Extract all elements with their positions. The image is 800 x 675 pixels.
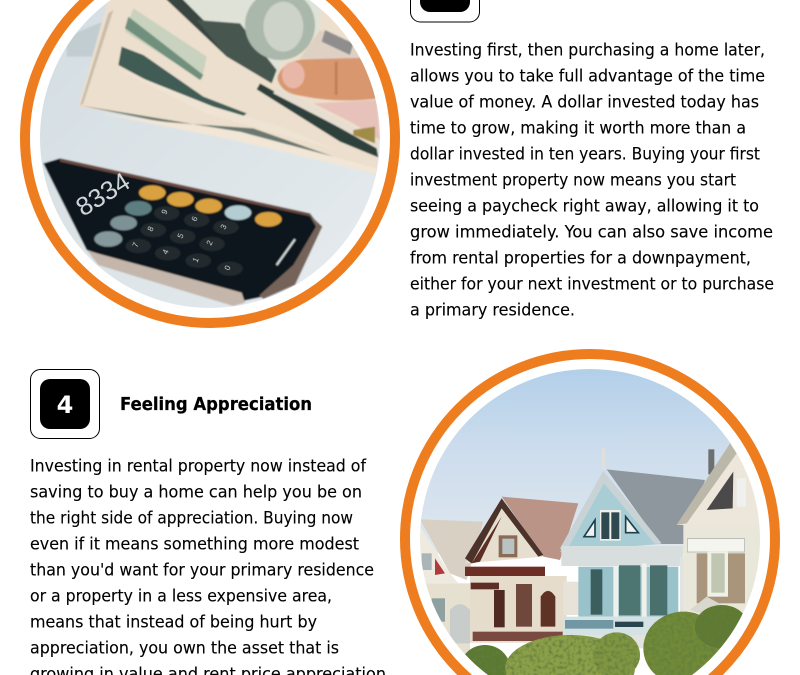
text block: invest first: either for your next investment or to purchase [410,274,774,294]
text block: invest first: a primary residence. [410,300,575,320]
text block: invest first [410,40,774,320]
blue house [607,469,705,544]
text block: invest first: value of money. A dollar invested today has [410,92,759,112]
text block: feeling appreciation: appreciation, you own the asset that is [30,638,339,658]
heading: feeling appreciation: Feeling Appreciation [120,394,312,415]
calculator keypad digits: 3 [219,223,229,231]
calculator keypad digits: 8 [146,225,156,233]
photo: cash and calculator phone [25,0,395,323]
text block: invest first: time to grow, making it worth more than a [410,118,746,138]
pink roof house [502,497,578,560]
calculator keypad digits: 5 [176,232,186,240]
photo: victorian houses [405,354,775,675]
text block: invest first: seeing a paycheck right away, allowing it to [410,196,759,216]
calculator keypad digits: 1 [191,256,201,264]
calculator keypad digits: 4 [161,248,171,256]
number badge 3 (cropped at top) [410,0,480,22]
right cream house [708,449,714,474]
text block: invest first: grow immediately. You can also save income [410,222,773,242]
text block: invest first: allows you to take full advantage of the time [410,66,765,86]
calculator keypad digits: 0 [223,264,233,272]
calculator keypad digits [131,208,233,272]
text block: feeling appreciation: means that instead of being hurt by [30,612,317,632]
text block: feeling appreciation [30,456,386,675]
text block: invest first: from rental properties for a downpayment, [410,248,751,268]
text block: feeling appreciation: Investing in rental property now instead of [30,456,367,476]
calculator display digits: 8334 [70,166,135,222]
number badge 4 [30,370,100,438]
calculator keypad digits: 2 [205,239,215,247]
calculator keypad digits: 9 [160,208,170,216]
text block: feeling appreciation: saving to buy a home can help you be on [30,482,362,502]
text block: invest first: Investing first, then purchasing a home later, [410,40,765,60]
text block: feeling appreciation: or a property in a less expensive area, [30,586,332,606]
bushes [460,605,748,675]
text block: feeling appreciation: than you'd want for your primary residence [30,560,374,580]
text block: feeling appreciation: even if it means something more modest [30,534,360,554]
calculator keypad digits: 7 [131,241,141,249]
calculator keypad digits: 6 [190,215,200,223]
text block: feeling appreciation: the right side of appreciation. Buying now [30,508,353,528]
left beige house [420,519,483,580]
text block: invest first: investment property now means you start [410,170,736,190]
number badge 4: 4 [57,391,73,419]
text block: invest first: dollar invested in ten years. Buying your first [410,144,760,164]
